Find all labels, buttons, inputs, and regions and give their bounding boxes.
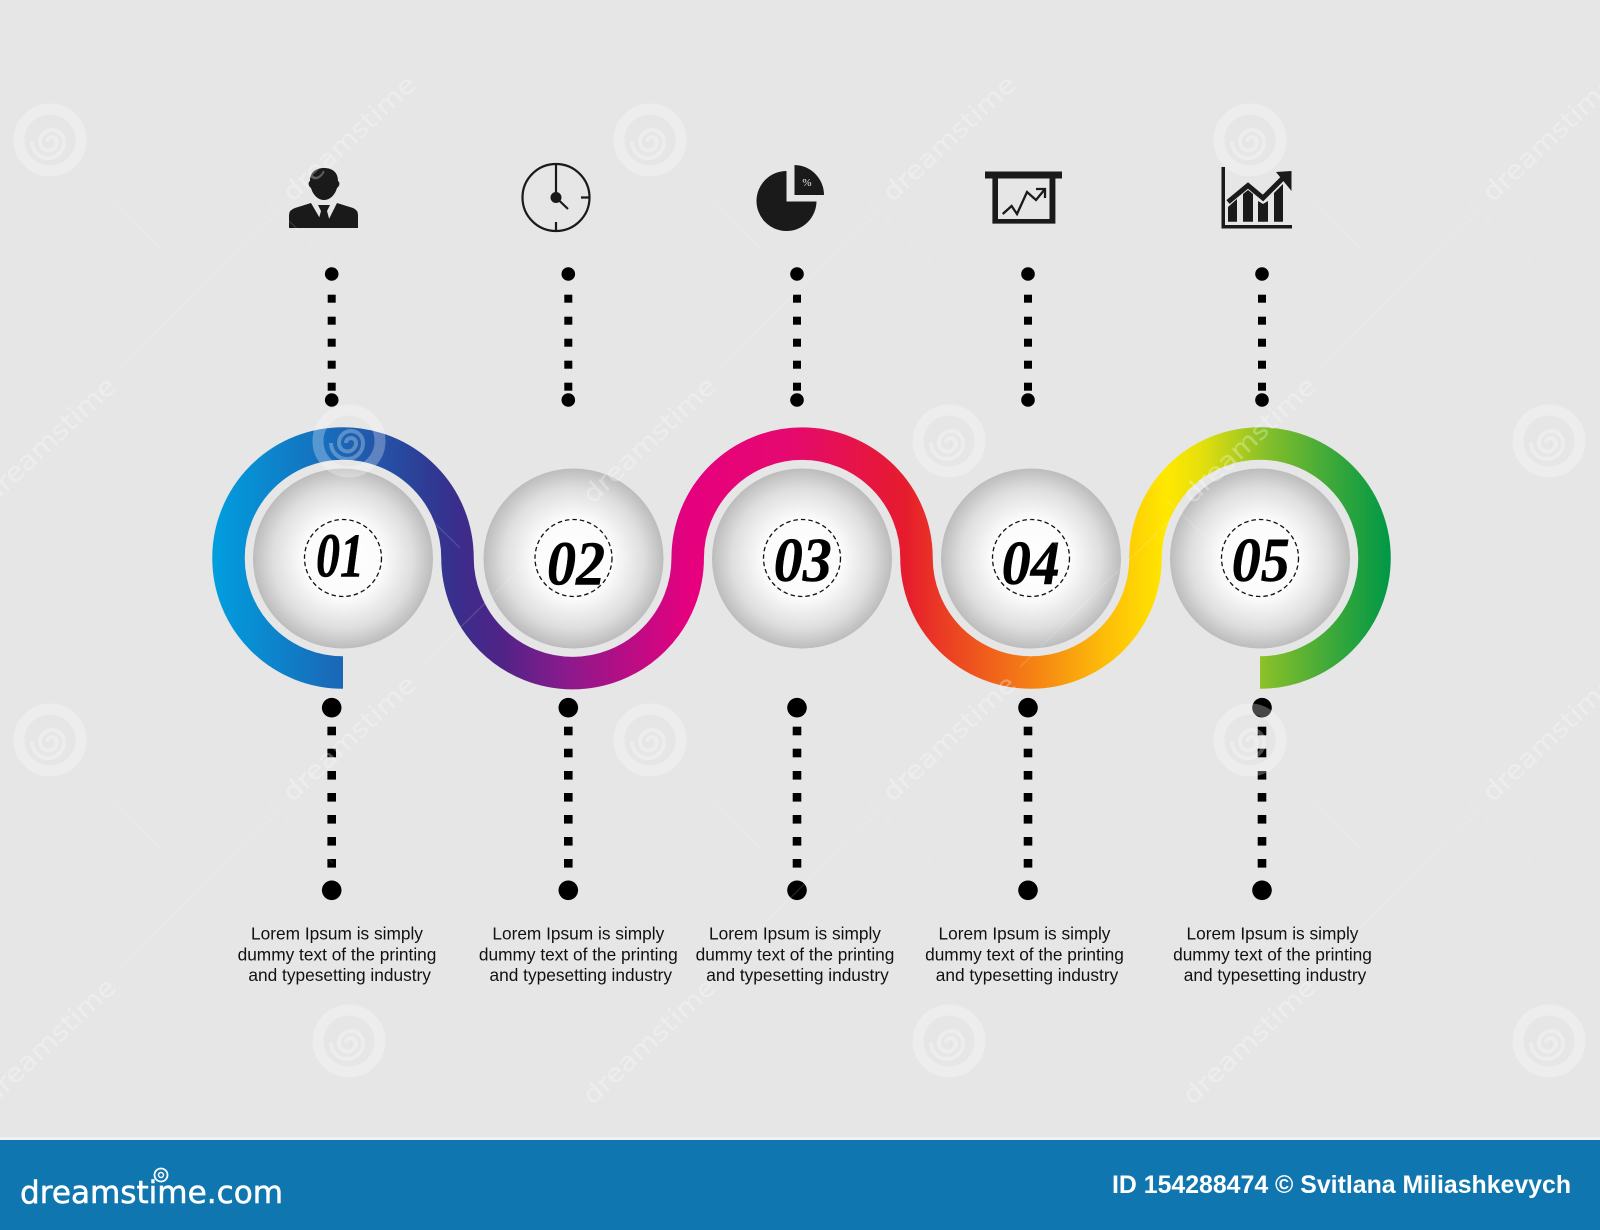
- connector: bottom 3: [787, 698, 807, 900]
- caption: step 2: [479, 924, 678, 985]
- caption: step 3: dummy text of the printing: [696, 944, 894, 964]
- caption: step 5: and typesetting industry: [1184, 965, 1367, 985]
- icon: businessman: [289, 168, 358, 228]
- connector: top 3: [790, 267, 804, 407]
- step 1 disc: [253, 468, 433, 648]
- step 3 disc: 03: [774, 527, 832, 595]
- caption: step 5: Lorem Ipsum is simply: [1187, 924, 1359, 944]
- connector: bottom 1: [322, 698, 342, 900]
- footer bar: [0, 1137, 1600, 1230]
- caption: step 3: and typesetting industry: [706, 965, 889, 985]
- step 2 disc: [484, 468, 664, 648]
- step 5 disc: [1170, 468, 1350, 648]
- step 4 disc: 04: [1002, 530, 1060, 598]
- caption: step 1: [238, 924, 436, 985]
- step 3 disc: [712, 468, 892, 648]
- watermark overlay: dreamstime: [877, 669, 1022, 808]
- icon: presentation board: [985, 172, 1062, 224]
- step 1 disc: 01: [316, 522, 364, 590]
- caption: step 1: Lorem Ipsum is simply: [251, 924, 423, 944]
- icon: pie chart with percent: %: [802, 177, 812, 189]
- caption: step 4: [925, 924, 1124, 985]
- connector: top 5: [1255, 267, 1269, 407]
- watermark overlay: dreamstime: [577, 371, 722, 510]
- step 5 disc: 05: [1232, 527, 1290, 595]
- caption: step 1: and typesetting industry: [248, 965, 431, 985]
- footer credit: ID 154288474 © Svitlana Miliashkevych: [1112, 1171, 1571, 1199]
- watermark overlay: dreamstime: [577, 972, 722, 1111]
- connector: top 2: [562, 267, 575, 407]
- connector: top 1: [325, 267, 339, 407]
- step 2 disc: 02: [547, 530, 605, 598]
- caption: step 4: and typesetting industry: [936, 965, 1119, 985]
- connector: bottom 5: [1252, 698, 1272, 900]
- icon: pie chart with percent: [757, 165, 824, 231]
- connector: top 4: [1021, 267, 1035, 407]
- caption: step 3: [696, 924, 894, 985]
- icon: growth chart: [1222, 167, 1292, 228]
- step 4 disc: [941, 468, 1121, 648]
- watermark overlay: dreamstime: [1177, 972, 1322, 1111]
- watermark overlay: dreamstime: [277, 69, 422, 208]
- caption: step 2: and typesetting industry: [490, 965, 672, 985]
- watermark overlay: dreamstime: [877, 69, 1022, 208]
- caption: step 2: Lorem Ipsum is simply: [492, 924, 665, 944]
- caption: step 4: dummy text of the printing: [925, 944, 1124, 964]
- caption: step 5: dummy text of the printing: [1173, 944, 1372, 964]
- watermark overlay: dreamstime: [1177, 371, 1322, 510]
- footer logo: dreamstime.com: [20, 1175, 283, 1211]
- connector: bottom 4: [1018, 698, 1038, 900]
- caption: step 5: [1173, 924, 1372, 985]
- caption: step 4: Lorem Ipsum is simply: [939, 924, 1111, 944]
- caption: step 1: dummy text of the printing: [238, 944, 436, 964]
- icon: clock: [522, 164, 590, 231]
- connector: bottom 2: [558, 698, 578, 900]
- caption: step 2: dummy text of the printing: [479, 944, 678, 964]
- watermark overlay: dreamstime: [277, 669, 422, 808]
- caption: step 3: Lorem Ipsum is simply: [709, 924, 881, 944]
- rainbow wave ribbon: [228, 444, 1374, 673]
